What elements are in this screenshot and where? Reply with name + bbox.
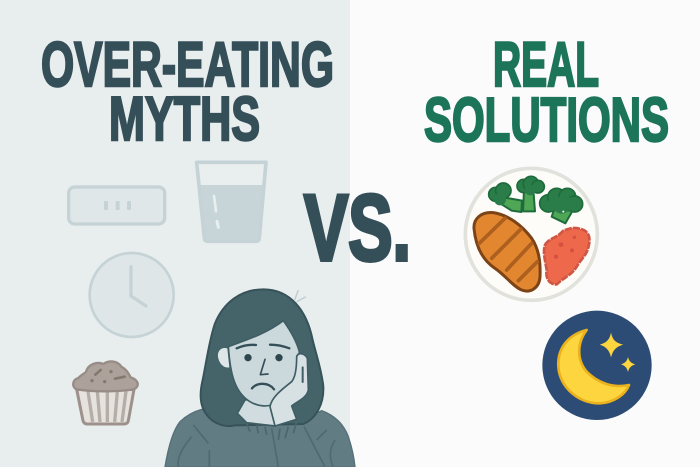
ear [218, 348, 229, 368]
panel: myths background [0, 0, 350, 467]
neck [237, 393, 292, 426]
heading: over-eating myths [41, 30, 334, 154]
icon: muffin [73, 361, 138, 424]
heading: over-eating myths: OVER-EATING [41, 30, 334, 100]
broccoli florets [489, 176, 583, 214]
panel: solutions background [350, 0, 700, 467]
hand [270, 354, 308, 426]
collar and sweater details [247, 422, 297, 440]
heading: real solutions [424, 30, 669, 155]
icon: healthy plate [465, 168, 597, 300]
sweater [165, 409, 355, 467]
frown [252, 384, 274, 389]
heading: versus: VS. [304, 175, 411, 280]
hair [201, 289, 323, 426]
icon: glass of water [197, 162, 266, 241]
salmon fillet [474, 213, 540, 291]
icon: scale or bar [69, 187, 165, 224]
plate [465, 168, 597, 300]
hair strand [295, 290, 306, 302]
broccoli stems [500, 197, 522, 212]
icon: moon and stars [542, 311, 652, 420]
nose [260, 359, 268, 375]
eyebrows and eyes [237, 345, 289, 348]
heading: over-eating myths: MYTHS [109, 85, 260, 154]
icon: clock [90, 253, 174, 337]
face [228, 321, 299, 406]
red side dish [544, 228, 589, 284]
illustration: worried woman resting cheek on hand [165, 289, 355, 467]
heading: real solutions: REAL [493, 30, 599, 100]
